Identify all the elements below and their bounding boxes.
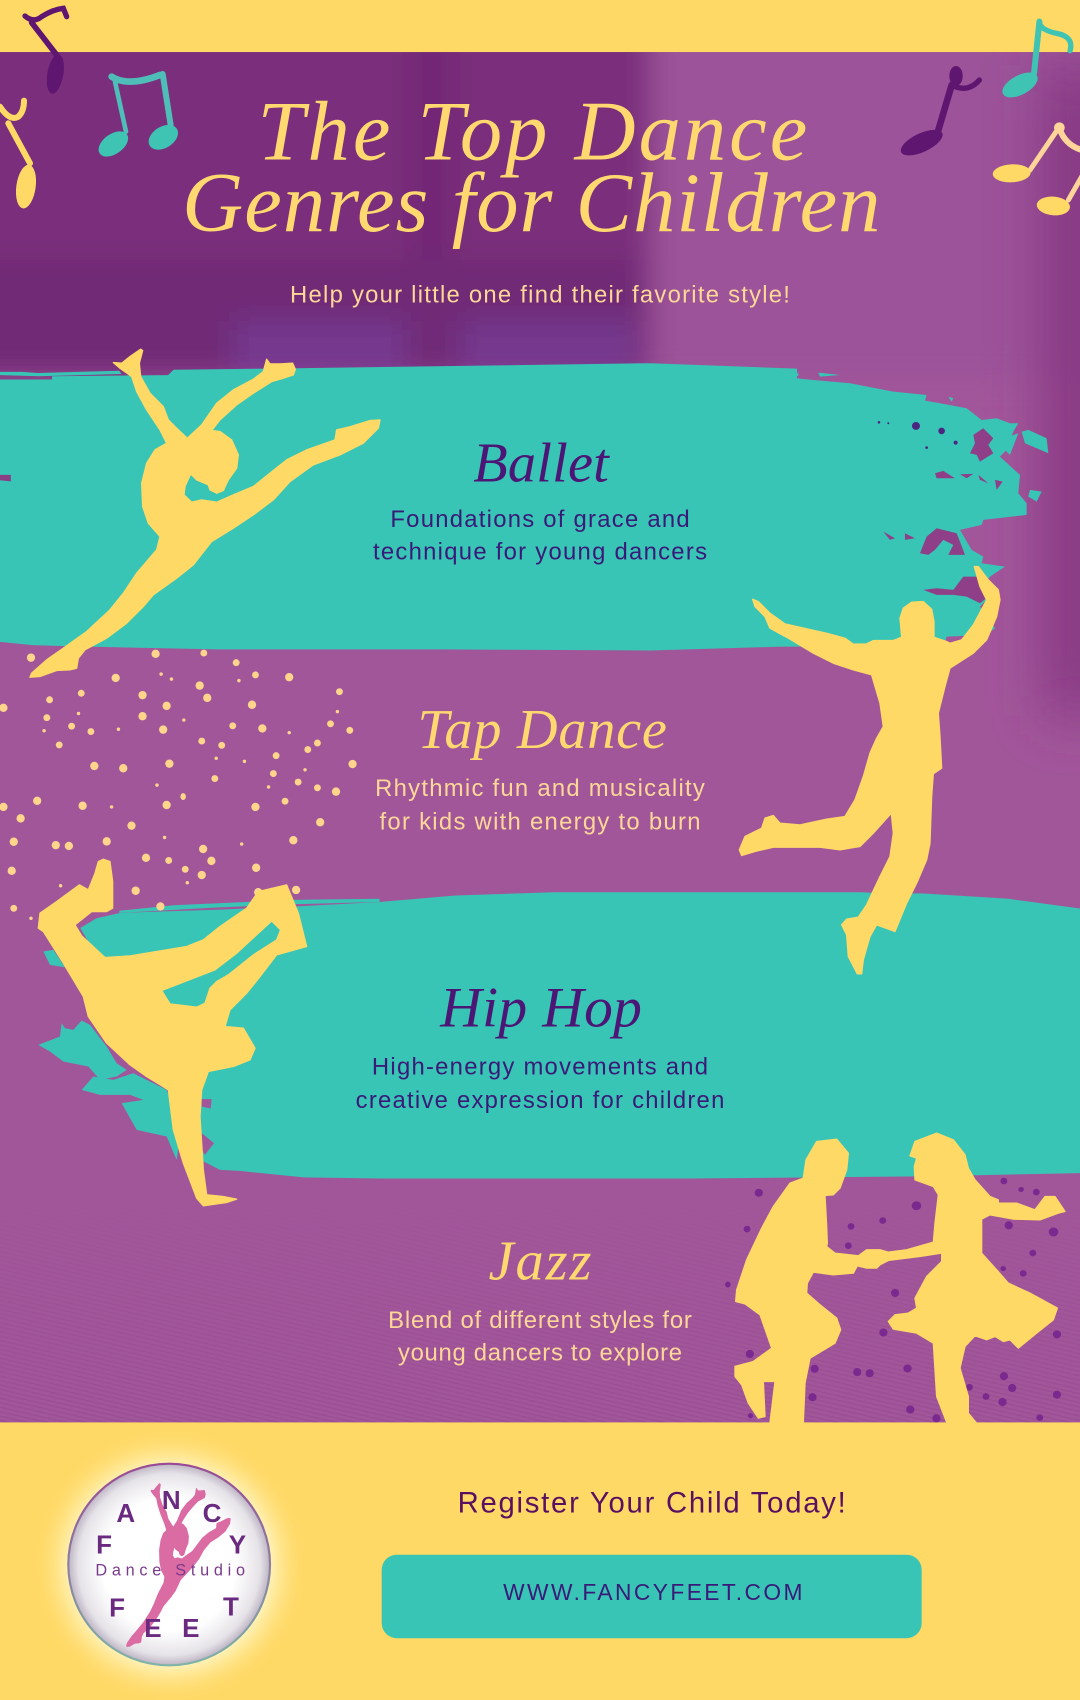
illustration: ballet dancer silhouette [30, 349, 380, 677]
icon: yellow music note left [0, 101, 39, 210]
text block: tap dance: Rhythmic fun and musicality [375, 775, 705, 802]
logo: Fancy Feet Dance Studio: F [109, 1593, 125, 1623]
text block: hip hop: High-energy movements and [372, 1053, 708, 1080]
logo: Fancy Feet Dance Studio: A [116, 1498, 135, 1528]
button: website: WWW.FANCYFEET.COM [503, 1579, 802, 1605]
text block: hip hop: Hip Hop [439, 977, 642, 1040]
logo: Fancy Feet Dance Studio [31, 1427, 309, 1700]
text block: tap dance: for kids with energy to burn [380, 808, 700, 835]
panel: hip hop brush stroke [38, 892, 1080, 1179]
logo: Fancy Feet Dance Studio: Dance Studio [95, 1561, 245, 1579]
text block: hip hop: creative expression for children [356, 1087, 724, 1114]
subtitle: Help your little one find their favorite style! [290, 281, 790, 308]
logo: Fancy Feet Dance Studio: F [96, 1530, 112, 1560]
decoration: yellow confetti dots [0, 650, 357, 920]
text block: jazz: Blend of different styles for [388, 1307, 692, 1334]
text block: hip hop [356, 977, 724, 1114]
text block: jazz: young dancers to explore [398, 1340, 682, 1367]
icon: dark purple music note [25, 8, 67, 95]
text block: tap dance [375, 699, 705, 835]
text block: jazz [388, 1230, 692, 1367]
illustration: jazz couple silhouette [735, 1133, 1065, 1422]
text block: jazz: Jazz [488, 1230, 592, 1292]
logo: Fancy Feet Dance Studio: N [162, 1485, 181, 1515]
title: Genres for Children [182, 157, 880, 250]
icon: yellow double music note right [992, 122, 1080, 217]
logo: Fancy Feet Dance Studio: E [144, 1613, 162, 1643]
title: The Top Dance [258, 85, 807, 178]
text block: ballet: Foundations of grace and [390, 506, 690, 533]
logo: Fancy Feet Dance Studio: E [182, 1613, 200, 1643]
footer yellow panel [0, 1422, 1080, 1700]
button: website [382, 1555, 922, 1638]
logo: Fancy Feet Dance Studio: T [223, 1591, 239, 1621]
text block: ballet [373, 432, 707, 565]
icon: dark purple music note right [897, 66, 979, 161]
logo: Fancy Feet Dance Studio: Y [229, 1530, 246, 1560]
illustration: hip hop dancer silhouette [38, 859, 307, 1206]
illustration: male jumping dancer silhouette [739, 567, 1000, 974]
icon: teal double music note [94, 74, 183, 162]
decoration: purple dots behind couple [725, 1178, 1061, 1422]
logo: Fancy Feet Dance Studio: C [203, 1498, 222, 1528]
icon: teal music note right [998, 22, 1071, 103]
title [182, 85, 880, 250]
top yellow band [0, 0, 1080, 52]
panel: ballet brush stroke [0, 363, 1048, 651]
call to action heading: Register Your Child Today! [458, 1487, 846, 1519]
text block: ballet: Ballet [473, 432, 610, 494]
text block: ballet: technique for young dancers [373, 538, 707, 565]
text block: tap dance: Tap Dance [417, 699, 667, 761]
